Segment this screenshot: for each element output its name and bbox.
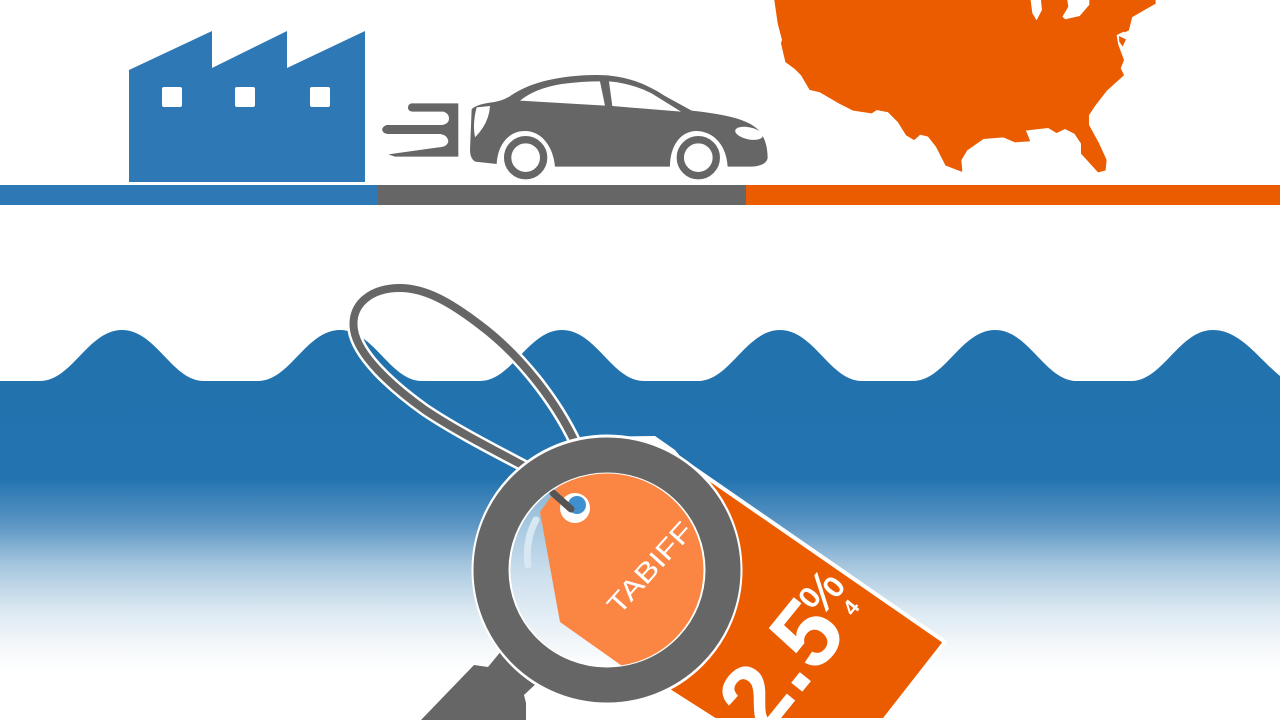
- small tag mark: 4: [837, 594, 865, 620]
- tag loop string: [353, 288, 575, 467]
- magnifier ring: [491, 454, 723, 686]
- timeline bar: grey segment: [378, 185, 746, 205]
- percent sign: %: [788, 560, 855, 624]
- timeline bar: orange segment: [746, 185, 1280, 205]
- icon: car with speed lines: [382, 75, 768, 176]
- ocean waves with gradient: [0, 330, 1280, 720]
- price tag: [590, 436, 945, 720]
- icon: factory: [129, 31, 365, 182]
- magnifying glass: [421, 454, 723, 720]
- tag label: TABIFF: [601, 516, 699, 620]
- lens: [509, 471, 707, 669]
- magnified tag: [524, 474, 704, 666]
- magnifier handle: [421, 650, 540, 720]
- tag eyelet: [560, 493, 590, 523]
- map: United States: [775, 0, 1155, 172]
- timeline bar: blue segment: [0, 185, 378, 205]
